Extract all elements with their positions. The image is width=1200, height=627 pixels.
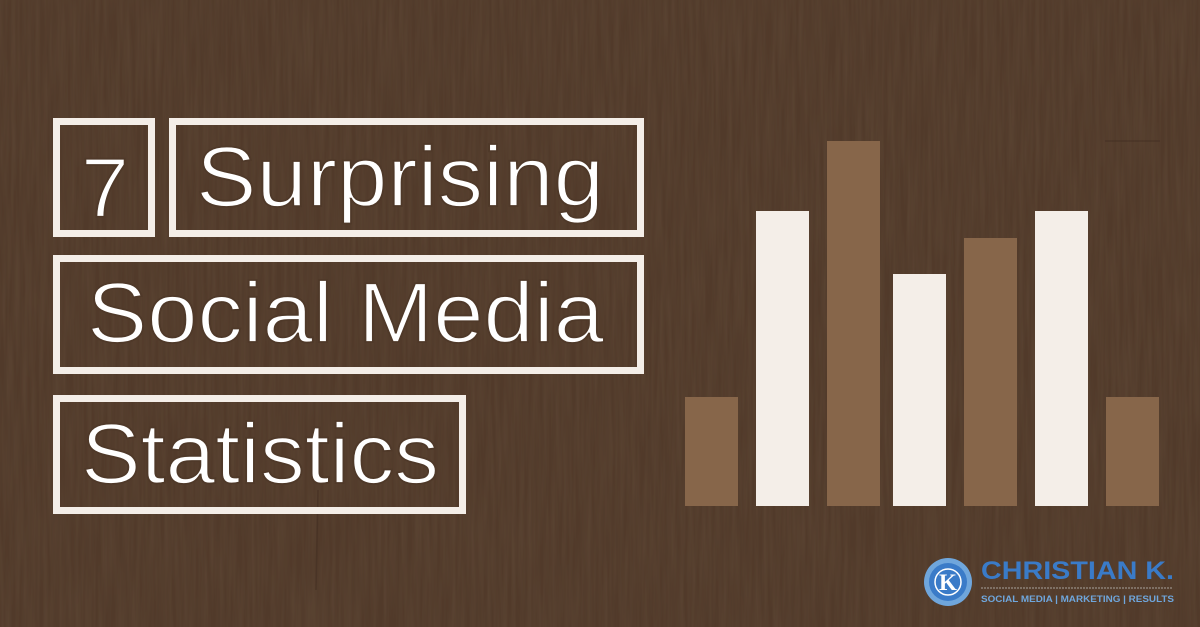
title box: Social Media: Social Media (87, 266, 605, 361)
icon: K badge: K (939, 570, 957, 595)
title (56, 122, 640, 510)
title box: Surprising: Surprising (196, 130, 604, 225)
title box: 7: 7 (81, 141, 129, 235)
brand name: CHRISTIAN K. (981, 557, 1174, 585)
title box: Statistics: Statistics (81, 407, 439, 502)
bar chart (685, 141, 1159, 506)
icon: K badge (924, 558, 972, 606)
title box: Surprising (172, 122, 640, 234)
tagline: SOCIAL MEDIA | MARKETING | RESULTS (981, 594, 1174, 605)
logo: Christian K. (924, 557, 1174, 606)
title box: 7 (56, 122, 152, 235)
